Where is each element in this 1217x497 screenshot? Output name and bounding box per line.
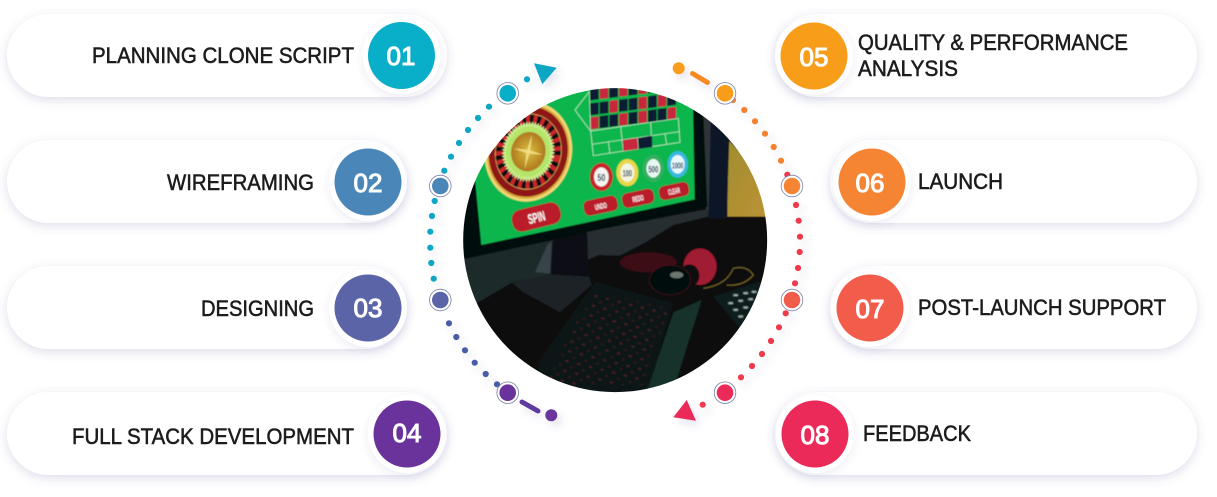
badge: 02: 02 <box>354 168 382 198</box>
label: step 04: FULL STACK DEVELOPMENT <box>72 424 354 449</box>
badge: 05: 05 <box>800 42 828 72</box>
badge: 07: 07 <box>856 294 884 324</box>
chip 50: 50 <box>597 173 606 184</box>
chip 50 <box>590 163 613 191</box>
headphones <box>620 248 753 295</box>
left dotted arc <box>427 63 557 421</box>
badge: 01: 01 <box>387 41 415 71</box>
badge: 05 <box>775 17 853 95</box>
label: step 05: QUALITY & PERFORMANCE <box>858 30 1128 55</box>
start dot: top right <box>673 62 685 74</box>
betting grid outlines <box>575 92 680 156</box>
node: upper right <box>781 175 803 197</box>
node: lower right <box>781 289 803 311</box>
mouse pad <box>647 300 702 390</box>
arrowhead: top left <box>534 63 557 84</box>
right dotted arc <box>673 62 803 421</box>
chip 500: 500 <box>648 164 658 174</box>
badge: 06: 06 <box>856 168 884 198</box>
node: lower left <box>430 289 451 311</box>
badge: 08 <box>776 395 854 473</box>
wall: grey <box>460 240 553 303</box>
panel: step 08 <box>775 392 1197 475</box>
node: top right <box>714 82 736 104</box>
button SPIN: SPIN <box>526 207 547 227</box>
label: step 05 <box>858 30 1128 81</box>
label: step 06: LAUNCH <box>918 169 1003 194</box>
node: bottom right <box>714 382 736 404</box>
roulette betting grid <box>589 88 677 130</box>
node: top left <box>497 82 518 104</box>
wall: yellow <box>727 140 770 217</box>
label: step 03: DESIGNING <box>201 296 314 321</box>
chip 500 <box>643 155 664 182</box>
panel: step 04 <box>7 392 447 475</box>
button REDO: REDO <box>632 193 645 204</box>
button REDO <box>621 188 655 209</box>
game screen <box>473 85 695 245</box>
badge: 06 <box>833 143 911 221</box>
panel: step 07 <box>830 266 1197 349</box>
bet cells <box>623 138 638 151</box>
badge: 03 <box>329 269 407 347</box>
end dot: bottom left <box>545 409 557 421</box>
monitor side <box>708 120 729 218</box>
panel: step 01 <box>7 14 447 97</box>
button CLEAR <box>658 181 690 201</box>
badge: 02 <box>329 143 407 221</box>
panel: step 03 <box>7 266 407 349</box>
badge: 04: 04 <box>393 418 421 448</box>
monitor stand <box>551 233 589 282</box>
chip 100: 100 <box>623 169 632 179</box>
chip 100 <box>616 159 638 186</box>
panel: step 06 <box>830 140 1197 223</box>
node: bottom left <box>497 382 518 404</box>
badge: 08: 08 <box>801 420 829 450</box>
stand base <box>512 274 592 312</box>
roulette wheel <box>484 104 574 203</box>
label: step 02: WIREFRAMING <box>167 170 314 195</box>
panel: step 02 <box>7 140 407 223</box>
badge: 04 <box>368 395 446 473</box>
label: step 01: PLANNING CLONE SCRIPT <box>92 43 354 68</box>
badge: 01 <box>362 16 440 94</box>
label: step 07: POST-LAUNCH SUPPORT <box>918 295 1166 320</box>
chip 1000 <box>667 151 688 178</box>
central photo: roulette game on monitor <box>460 78 770 395</box>
label: step 05: ANALYSIS <box>858 56 958 81</box>
panel: step 05 <box>775 14 1197 97</box>
dash: bottom left <box>522 402 538 411</box>
arrowhead: bottom right <box>673 400 696 421</box>
monitor bezel <box>460 105 707 258</box>
button CLEAR: CLEAR <box>667 186 681 197</box>
label: step 08: FEEDBACK <box>863 421 971 446</box>
keyboard: main <box>538 282 673 392</box>
dash: top right <box>692 74 708 82</box>
button UNDO: UNDO <box>594 201 608 212</box>
badge: 03: 03 <box>354 293 382 323</box>
badge: 07 <box>831 269 909 347</box>
chip 1000: 1000 <box>672 160 683 170</box>
button SPIN <box>510 200 563 234</box>
node: upper left <box>430 175 451 197</box>
keyboard: secondary <box>714 282 761 328</box>
button UNDO <box>582 195 619 217</box>
